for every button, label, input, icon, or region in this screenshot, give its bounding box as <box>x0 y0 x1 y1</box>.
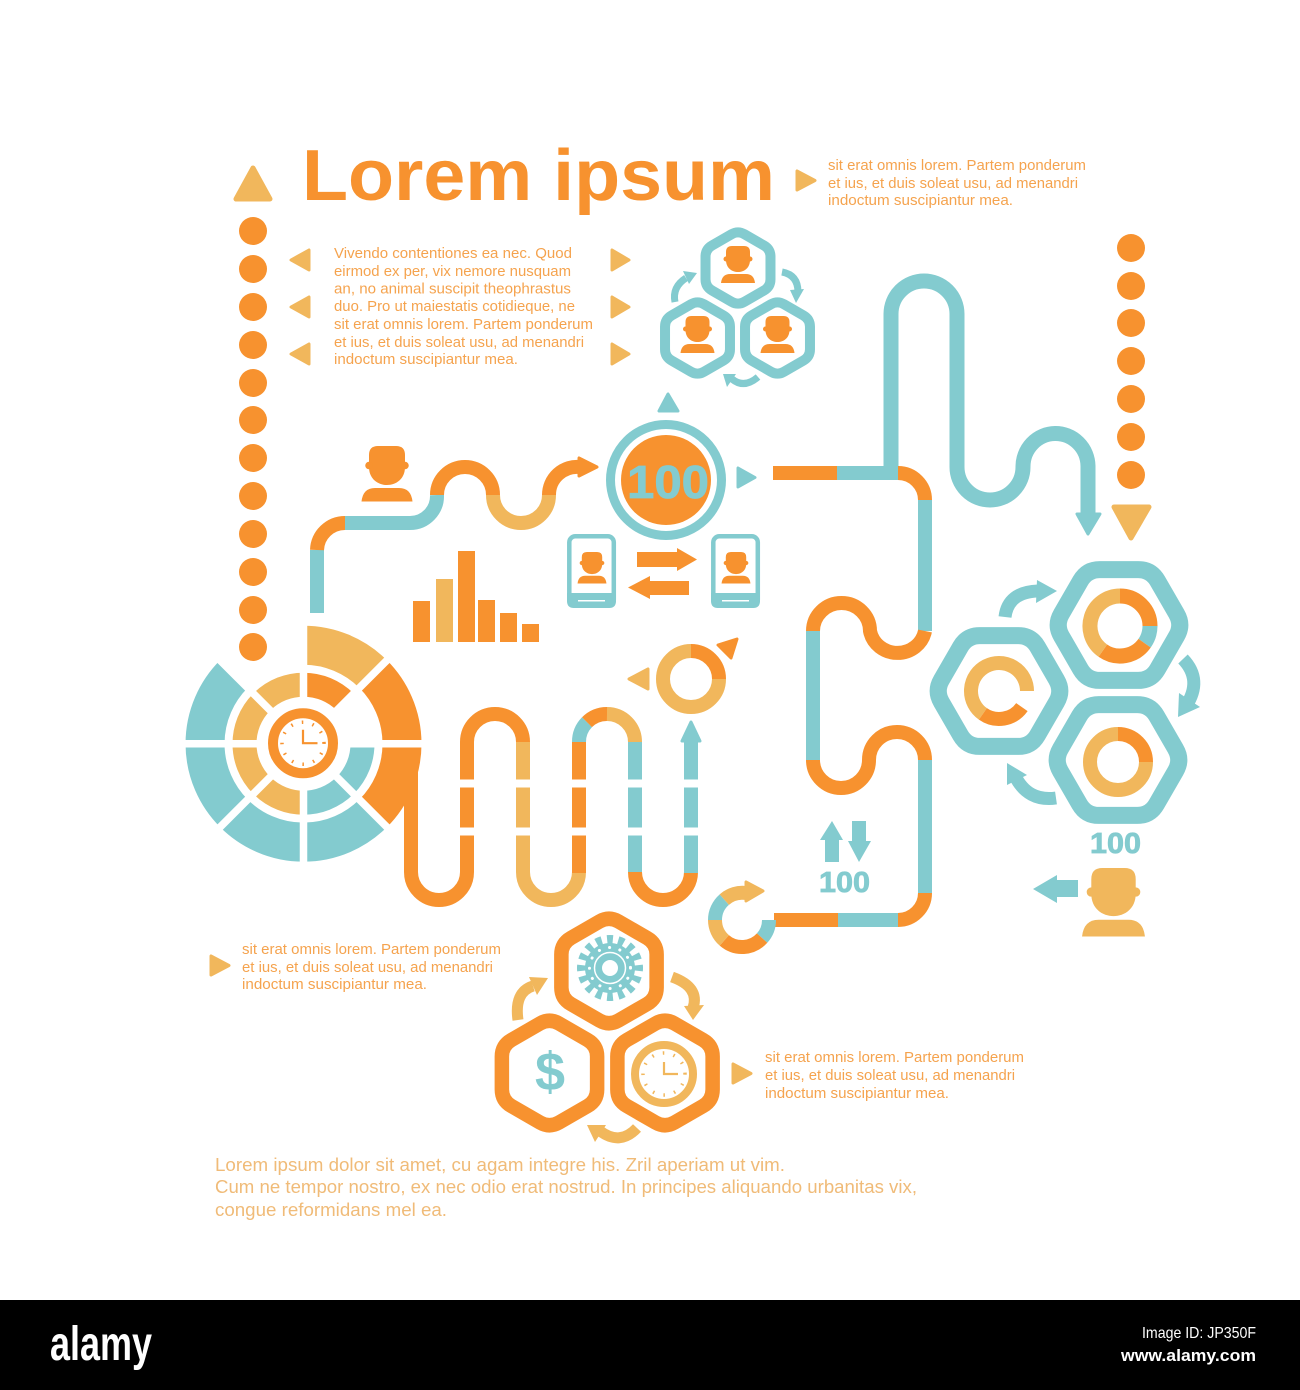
hexagon cluster: people <box>665 232 810 387</box>
title: Lorem ipsum <box>302 136 775 216</box>
text block: lower left: et ius, et duis soleat usu, ad menandri <box>242 960 493 976</box>
triangles: paragraph left <box>291 250 309 364</box>
footer bar: watermark strip <box>0 1300 1300 1390</box>
triangle: bottom of right dotted line <box>1114 507 1149 538</box>
text block: lower right <box>765 1050 1024 1102</box>
hexagon cluster: gear, dollar, clock <box>502 919 713 1142</box>
text block: intro paragraph: sit erat omnis lorem. Partem ponderum <box>334 317 593 333</box>
triangles: paragraph right <box>612 250 629 364</box>
text block: intro paragraph: eirmod ex per, vix nemore nusquam <box>334 264 571 280</box>
triangle: left text <box>211 956 229 975</box>
text block: intro paragraph: duo. Pro ut maiestatis cotidieque, ne <box>334 299 575 315</box>
bar chart <box>413 551 539 642</box>
footer bar: watermark strip: alamy <box>50 1318 152 1371</box>
dotted line: right <box>1117 234 1145 489</box>
donut chart: left hexagon <box>971 663 1027 719</box>
footer bar: watermark strip: Image ID: JP350F <box>1142 1325 1256 1342</box>
winding path: person to 100 circle <box>317 458 597 613</box>
dotted line: left <box>239 217 267 661</box>
large segmented donut with clock <box>180 621 426 867</box>
text block: lower right: sit erat omnis lorem. Partem ponderum <box>765 1050 1024 1066</box>
text block: intro paragraph: an, no animal suscipit theophrastus <box>334 282 571 298</box>
arrow: pointing left from person <box>1033 875 1078 903</box>
small donut with triangles <box>629 639 737 707</box>
text block: lower left: sit erat omnis lorem. Partem ponderum <box>242 942 501 958</box>
ring arrow: bottom connector <box>715 882 769 947</box>
donut chart: bottom hexagon <box>1090 734 1146 790</box>
icon: dollar: $ <box>535 1042 565 1102</box>
text block: footer paragraph <box>215 1155 917 1220</box>
icon: clock <box>635 1045 693 1103</box>
text block: lower right: indoctum suscipiantur mea. <box>765 1086 949 1102</box>
triangle: right of 100 circle <box>738 468 755 487</box>
triangle: above 100 circle <box>659 394 678 411</box>
footer bar: watermark strip: www.alamy.com <box>1120 1346 1256 1365</box>
text block: footer paragraph: congue reformidans mel ea. <box>215 1200 447 1220</box>
text block: lower right: et ius, et duis soleat usu, ad menandri <box>765 1068 1015 1084</box>
person icon <box>362 446 412 502</box>
donut chart: top hexagon <box>1090 596 1150 656</box>
text block: lower left <box>242 942 501 993</box>
connector lines on right: orange and teal network <box>773 281 1100 920</box>
text block: top right: indoctum suscipiantur mea. <box>828 193 1013 209</box>
text block: top right: sit erat omnis lorem. Partem ponderum <box>828 158 1086 174</box>
phone with person: left <box>567 536 616 608</box>
triangle: right text <box>733 1064 751 1083</box>
100 circle: 100 <box>627 456 709 508</box>
text block: intro paragraph: Vivendo contentiones ea nec. Quod <box>334 246 572 262</box>
text block: top right <box>828 158 1086 209</box>
icon: gear <box>582 940 638 996</box>
arrows: exchange between phones <box>628 548 697 599</box>
winding bar path: from donut to small ring <box>411 714 701 900</box>
text block: intro paragraph: et ius, et duis soleat usu, ad menandri <box>334 335 584 351</box>
text block: intro paragraph: indoctum suscipiantur mea. <box>334 352 518 368</box>
label: 100 lower: 100 <box>819 867 870 899</box>
triangle: title arrow <box>797 171 815 190</box>
text block: intro paragraph <box>334 246 593 368</box>
text block: top right: et ius, et duis soleat usu, ad menandri <box>828 176 1078 192</box>
label: 100 right: 100 <box>1090 828 1141 860</box>
hexagon cluster: donut charts <box>938 570 1200 815</box>
person icon: light <box>1082 868 1145 936</box>
text block: lower left: indoctum suscipiantur mea. <box>242 977 427 993</box>
triangle: top of left dotted line <box>236 168 270 199</box>
text block: footer paragraph: Lorem ipsum dolor sit amet, cu agam integre his. Zril aperiam ut vim. <box>215 1155 785 1175</box>
text block: footer paragraph: Cum ne tempor nostro, ex nec odio erat nostrud. In principes aliquando urbanitas vix, <box>215 1177 917 1197</box>
phone with person: right <box>711 536 760 608</box>
clock: donut centre <box>273 713 333 773</box>
arrows: up and down <box>820 821 871 862</box>
100 circle <box>610 424 722 536</box>
